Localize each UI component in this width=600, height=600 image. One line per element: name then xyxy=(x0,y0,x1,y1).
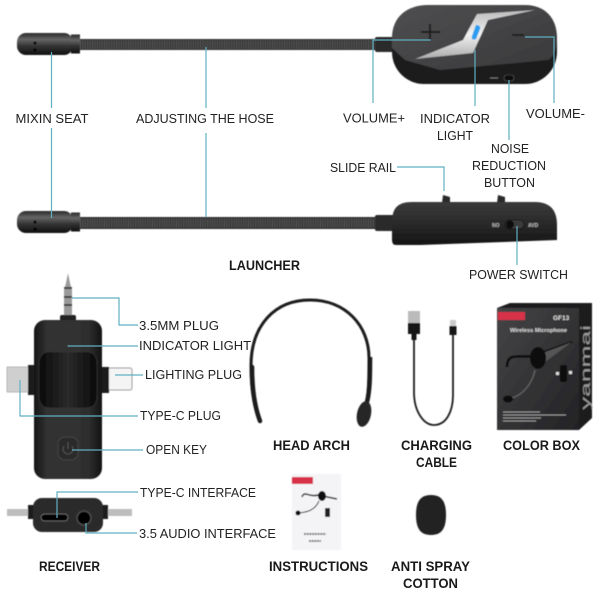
icon: audio port xyxy=(77,511,91,525)
icon: type-c plug xyxy=(7,367,29,392)
label: slide rail: SLIDE RAIL xyxy=(330,160,396,175)
label: indicator light xyxy=(420,111,490,143)
icon: silver swoosh xyxy=(415,10,535,59)
icon: power key xyxy=(58,437,78,460)
label: indicator light: INDICATOR LIGHT xyxy=(139,338,251,353)
box logo xyxy=(498,312,525,320)
label: type-c interface: TYPE-C INTERFACE xyxy=(140,485,256,500)
icon: plus button xyxy=(421,24,440,41)
transmitter back: AVD xyxy=(528,223,539,229)
icon: lightning plug xyxy=(108,368,132,390)
heading: anti spray cotton: COTTON xyxy=(403,576,458,591)
callout lines: launcher xyxy=(52,37,554,265)
box side brand: yanmai xyxy=(578,325,593,410)
label: 3.5mm plug: 3.5MM PLUG xyxy=(139,318,219,333)
icon: power switch xyxy=(505,220,524,229)
label: noise reduction button: REDUCTION xyxy=(472,158,546,173)
switch marks: NO xyxy=(492,223,500,229)
microphone bottom: head and hose xyxy=(17,211,376,233)
receiver bottom view xyxy=(7,498,132,532)
label: power switch: POWER SWITCH xyxy=(469,267,568,282)
heading: color box: COLOR BOX xyxy=(503,438,580,453)
box title: Wireless Microphone xyxy=(510,328,567,334)
anti spray cotton foam xyxy=(416,495,446,535)
icon: 3.5mm jack xyxy=(64,273,72,316)
label: volume plus: VOLUME+ xyxy=(343,110,405,126)
icon: blue indicator LED xyxy=(472,25,480,40)
label: noise reduction button xyxy=(472,141,546,190)
label: volume minus: VOLUME- xyxy=(526,106,585,121)
heading: instructions: INSTRUCTIONS xyxy=(269,559,368,574)
icon: noise reduction switch xyxy=(504,75,514,81)
label: type-c plug: TYPE-C PLUG xyxy=(140,408,221,423)
icon: minus button xyxy=(512,34,524,36)
box feature text xyxy=(503,412,566,421)
label: mixin seat: MIXIN SEAT xyxy=(16,111,89,126)
icon: usb-c connector xyxy=(450,320,456,326)
transmitter front xyxy=(375,5,557,84)
heading: head arch: HEAD ARCH xyxy=(273,438,350,453)
head arch xyxy=(251,300,374,428)
heading: anti spray cotton xyxy=(391,559,470,591)
heading: launcher: LAUNCHER xyxy=(229,258,300,273)
heading: receiver: RECEIVER xyxy=(39,559,100,574)
label: noise reduction button: NOISE xyxy=(491,141,529,156)
label: lighting plug: LIGHTING PLUG xyxy=(145,367,242,382)
transmitter back xyxy=(375,195,557,245)
label: open key: OPEN KEY xyxy=(146,442,207,457)
heading: anti spray cotton: ANTI SPRAY xyxy=(391,559,470,574)
receiver body xyxy=(34,320,102,479)
charging cable xyxy=(408,311,456,425)
label: 3.5 audio interface: 3.5 AUDIO INTERFACE xyxy=(139,526,276,541)
instructions booklet xyxy=(292,474,341,550)
icon: type-c port xyxy=(41,514,68,521)
callout lines: receiver xyxy=(20,298,143,533)
label: noise reduction button: BUTTON xyxy=(484,175,535,190)
box model name: GF13 xyxy=(553,315,570,322)
heading: charging cable: CABLE xyxy=(416,455,457,470)
icon: usb-a connector xyxy=(408,311,420,323)
icon: glossy panel xyxy=(39,352,97,408)
box product image xyxy=(503,342,572,402)
heading: charging cable: CHARGING xyxy=(401,438,472,453)
receiver front xyxy=(7,273,132,479)
heading: charging cable xyxy=(401,438,472,470)
label: indicator light: INDICATOR xyxy=(420,111,490,126)
color box xyxy=(497,303,593,430)
microphone top: head and hose xyxy=(17,33,376,55)
label: adjusting the hose: ADJUSTING THE HOSE xyxy=(136,111,274,126)
label: indicator light: LIGHT xyxy=(437,128,473,143)
